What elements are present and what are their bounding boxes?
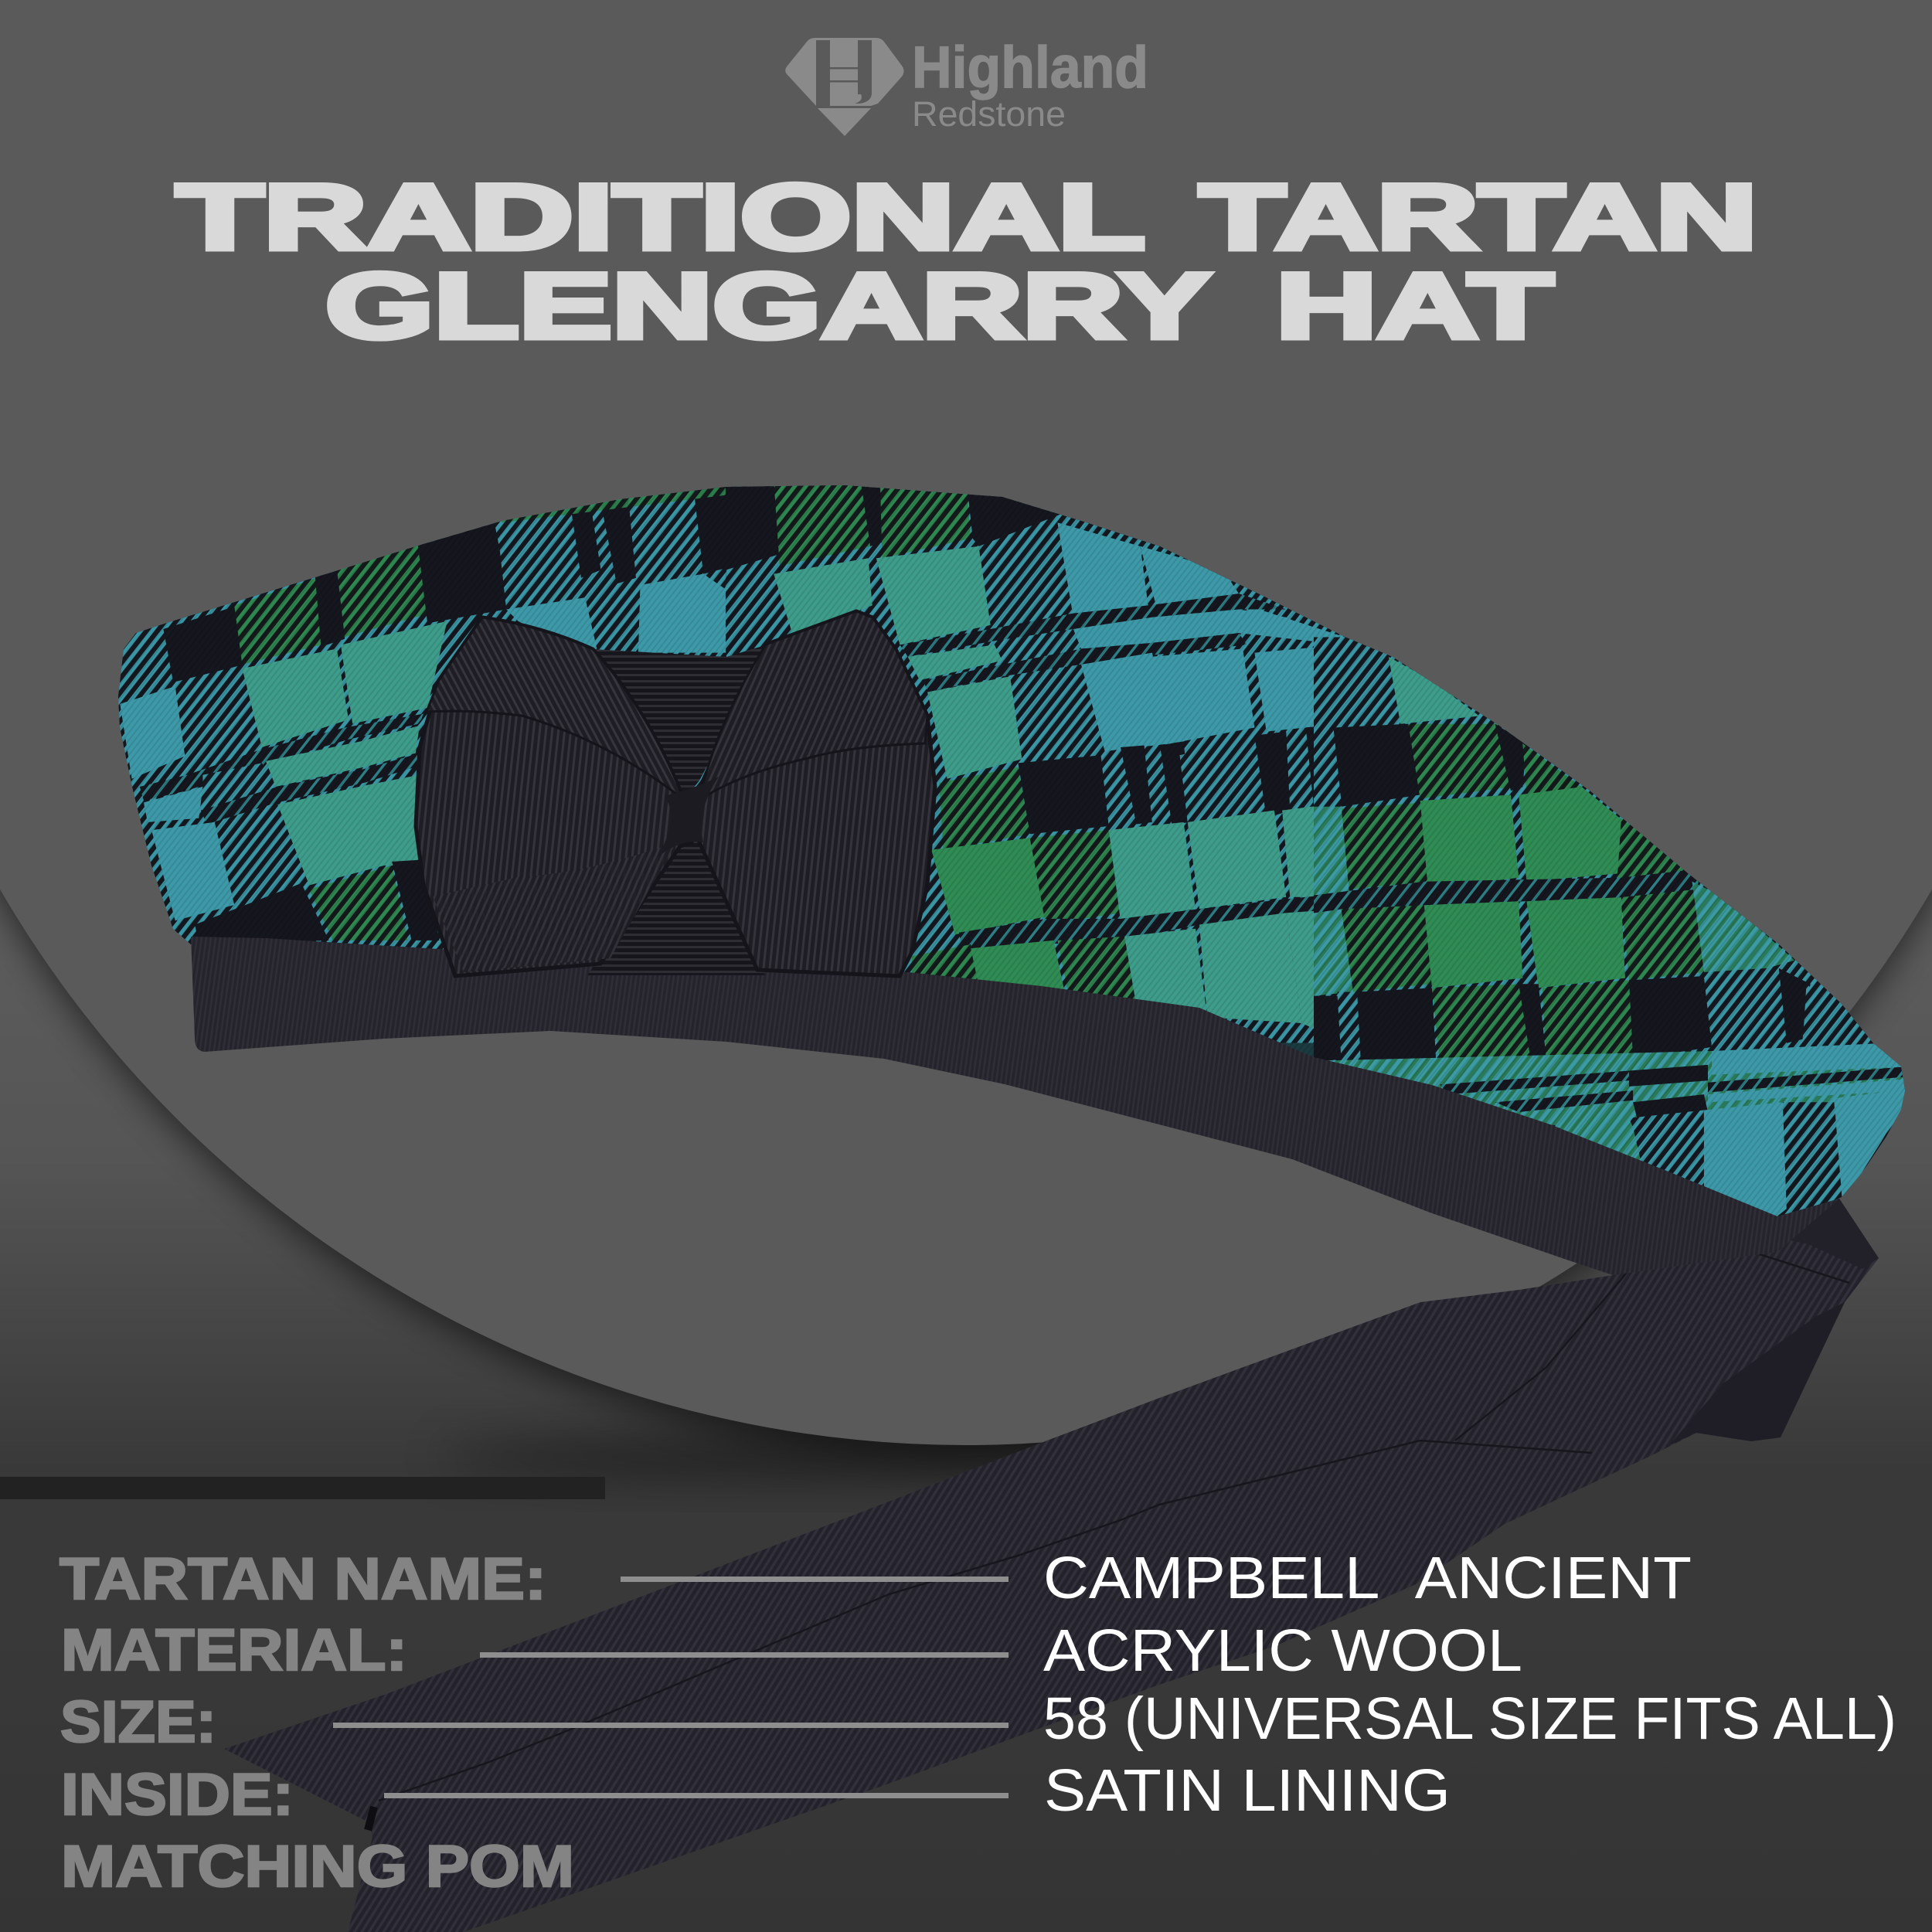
spec values [1043, 1545, 1896, 1824]
spec values: CAMPBELL ANCIENT [1043, 1545, 1692, 1611]
hat band [191, 937, 1839, 1275]
bow bottom strap [587, 835, 765, 975]
title: HAT [1276, 254, 1553, 358]
bow top strap [593, 643, 773, 800]
bow right upper flap [699, 611, 927, 800]
tartan right section [1314, 637, 1932, 1229]
bow left lower fold [433, 842, 676, 972]
divider bar [0, 1477, 605, 1499]
spec labels: MATERIAL: [61, 1617, 407, 1683]
spec labels: MATCHING POM [61, 1834, 574, 1900]
title: GLENGARRY [325, 254, 1211, 358]
title: TARTAN [1199, 165, 1757, 269]
bow right wing [692, 611, 935, 976]
background circle shadow [0, 0, 1932, 1475]
spec labels: TARTAN NAME: [60, 1546, 546, 1612]
tartan centre section [726, 471, 1345, 1043]
logo mark: diamond [785, 38, 904, 136]
hat bow [416, 611, 935, 976]
background circle [0, 0, 1932, 1445]
spec values: ACRYLIC WOOL [1043, 1617, 1522, 1684]
spec labels: INSIDE: [61, 1762, 294, 1828]
logo wordmark [912, 35, 1148, 134]
title: TRADITIONAL [176, 165, 1145, 269]
spec values: SATIN LINING [1044, 1757, 1451, 1824]
tartan left section [118, 487, 726, 949]
spec values: 58 (UNIVERSAL SIZE FITS ALL) [1043, 1685, 1896, 1752]
logo wordmark: Highland [912, 35, 1148, 100]
spec labels: SIZE: [60, 1689, 216, 1755]
title [176, 165, 1757, 358]
connector lines [333, 1577, 1009, 1798]
hat ribbon tail [224, 1199, 1879, 1932]
logo wordmark: Redstone [912, 94, 1066, 134]
bow left wing [416, 617, 692, 976]
hat tartan body [100, 471, 1932, 1244]
tartan weave texture [100, 471, 1917, 1244]
spec labels [60, 1546, 574, 1900]
bow knot [657, 777, 719, 858]
bow left upper flap [427, 617, 684, 800]
logo: Highland Redstone [785, 35, 1148, 136]
